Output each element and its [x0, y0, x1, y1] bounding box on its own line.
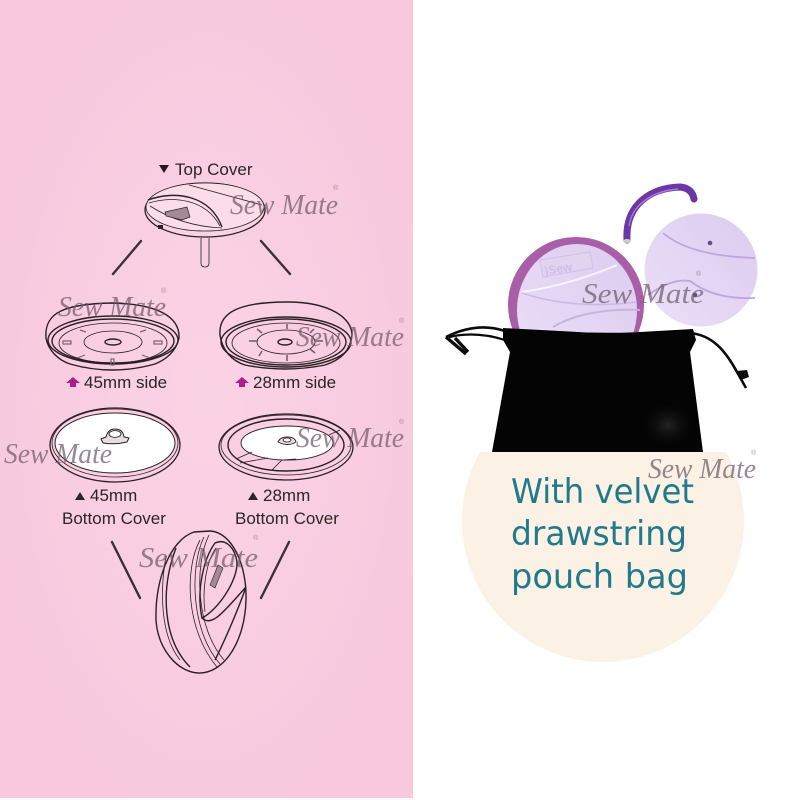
- watermarks: Sew Mate: Sew Mate: [582, 278, 704, 310]
- icon: 28mm side drawing: [220, 302, 352, 369]
- panel: pink parts diagram background: [0, 0, 413, 798]
- watermarks: Sew Mate: ®: [399, 317, 405, 325]
- caption text: [511, 472, 694, 597]
- watermarks: Sew Mate: ®: [696, 270, 702, 278]
- icon: 28mm bottom cover drawing: [219, 414, 353, 480]
- panel: cream caption blob: [462, 452, 744, 662]
- watermarks: Sew Mate: ®: [333, 184, 339, 192]
- icon: assembled purple disc: )Sew: [543, 260, 574, 278]
- label: 45mm side: 45mm side: [84, 373, 167, 392]
- watermarks: Sew Mate: Sew Mate: [4, 438, 112, 470]
- icon: assembled button tool drawing: [156, 531, 246, 673]
- icon: loose lilac disc: [644, 214, 758, 326]
- watermarks: Sew Mate: ®: [253, 534, 259, 542]
- watermarks: Sew Mate: ®: [399, 418, 405, 426]
- label: 28mm bottom cover: Bottom Cover: [235, 509, 339, 528]
- label: 45mm bottom cover: 45mm: [90, 486, 137, 505]
- icon: top cover drawing: [145, 183, 265, 267]
- label: 28mm side: 28mm side: [253, 373, 336, 392]
- label: 45mm bottom cover: [62, 486, 166, 528]
- connector lines: bottom covers to assembled: [112, 542, 289, 598]
- label: 45mm bottom cover: Bottom Cover: [62, 509, 166, 528]
- watermarks: Sew Mate: Sew Mate: [58, 291, 166, 323]
- icon: 45mm bottom cover drawing: [50, 408, 180, 482]
- connector lines: top cover to sides: [113, 241, 290, 274]
- watermarks: Sew Mate: Sew Mate: [139, 542, 258, 574]
- watermarks: Sew Mate: Sew Mate: [648, 453, 756, 485]
- caption text: drawstring: [511, 514, 687, 554]
- icon: assembled purple disc: [508, 237, 644, 376]
- label: top cover: Top Cover: [175, 160, 253, 179]
- watermarks: Sew Mate: [4, 184, 757, 574]
- watermarks: Sew Mate: ®: [751, 449, 757, 457]
- watermarks: Sew Mate: ®: [161, 287, 167, 295]
- icon: 45mm side drawing: [46, 303, 179, 370]
- label: 28mm bottom cover: [235, 486, 339, 528]
- watermarks: Sew Mate: Sew Mate: [296, 422, 404, 454]
- caption text: With velvet: [511, 472, 694, 512]
- icon: purple cord: [623, 187, 694, 243]
- watermarks: Sew Mate: Sew Mate: [296, 321, 404, 353]
- icon: black velvet drawstring pouch: [446, 327, 749, 452]
- watermarks: Sew Mate: Sew Mate: [230, 189, 338, 221]
- caption text: pouch bag: [511, 557, 688, 597]
- label: 28mm bottom cover: 28mm: [263, 486, 310, 505]
